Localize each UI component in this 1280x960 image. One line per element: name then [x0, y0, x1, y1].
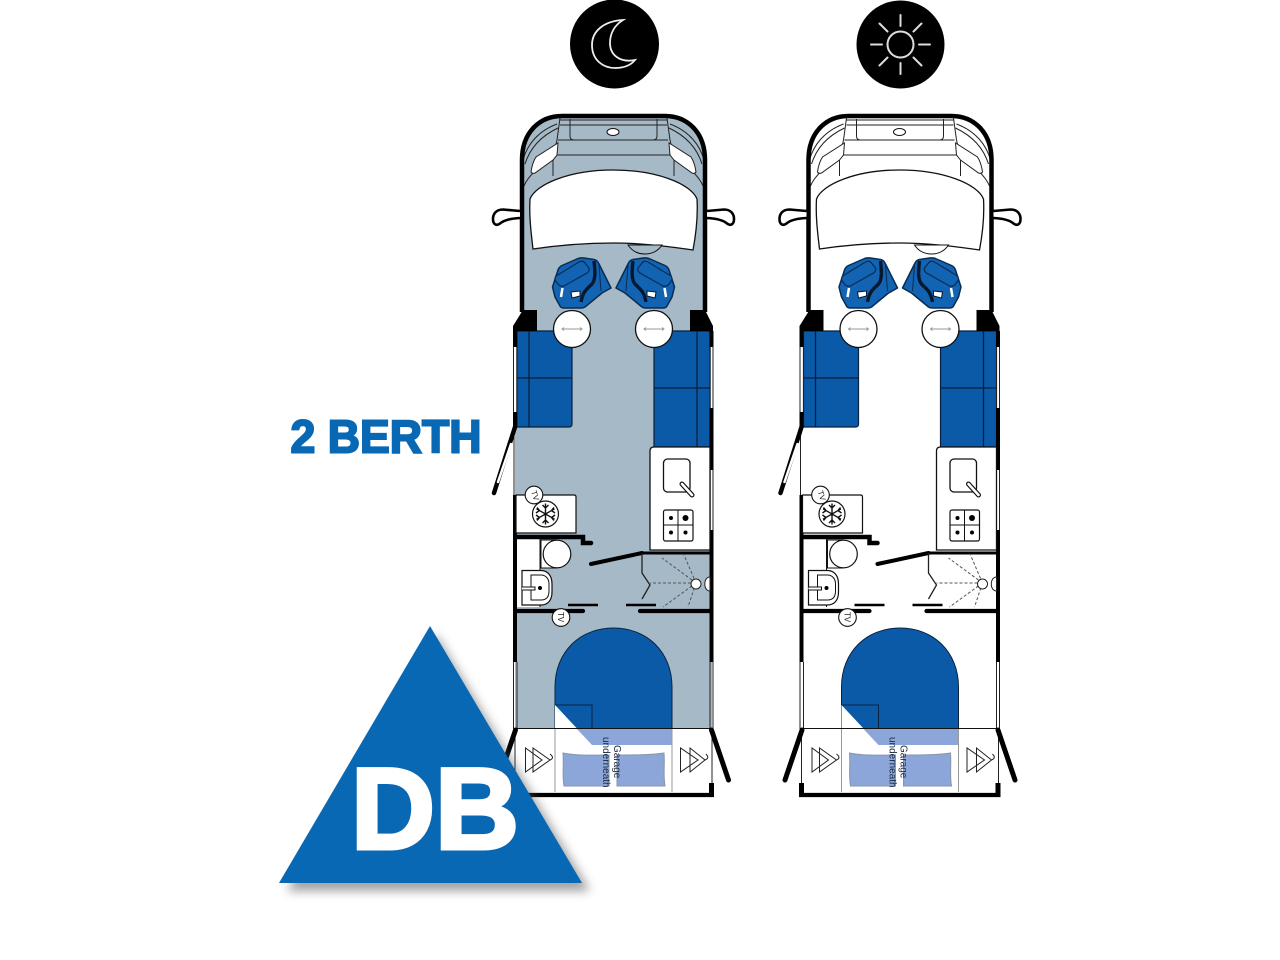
hob	[664, 510, 693, 541]
headlights	[531, 143, 696, 173]
badge: DB triangle	[279, 626, 590, 891]
icon: hangers left	[812, 748, 839, 772]
rear wardrobe section: underneath	[886, 737, 898, 788]
pillar blocks	[513, 310, 713, 331]
swivel circles	[840, 310, 959, 348]
interior walls and doors	[802, 537, 996, 611]
basin	[522, 570, 552, 605]
icon: hangers right	[680, 748, 708, 772]
garage underneath label: Garage	[898, 745, 908, 779]
TV label lower: TV	[556, 612, 565, 623]
seat: driver	[839, 258, 898, 308]
interior walls and doors	[516, 537, 710, 611]
entrance door	[494, 427, 515, 493]
shower	[642, 553, 710, 607]
right sofa	[940, 331, 996, 447]
toilet	[828, 540, 857, 568]
dashboard bump	[914, 245, 948, 254]
TV label lower: TV	[842, 612, 852, 623]
van floor	[802, 116, 998, 729]
wing mirrors	[780, 210, 1020, 225]
icon: moon (night layout)	[570, 0, 659, 88]
body outline	[522, 116, 705, 312]
rear wardrobe section	[785, 728, 1015, 795]
cab roof lines	[810, 118, 990, 186]
icon: snowflake	[532, 501, 558, 527]
icon: hangers right	[967, 748, 994, 772]
pillar blocks	[800, 310, 1000, 331]
TV label lower	[552, 609, 570, 626]
TV label upper: TV	[529, 489, 541, 502]
hob	[950, 510, 980, 541]
roof vent	[607, 128, 619, 136]
swivel circles	[554, 310, 672, 348]
entrance door	[780, 427, 802, 493]
pillow right	[617, 753, 665, 786]
pillow left	[563, 753, 609, 786]
TV label upper: TV	[816, 489, 828, 502]
shower	[928, 553, 996, 607]
fridge unit	[802, 486, 862, 533]
roof vent	[894, 128, 906, 136]
garage underneath label: Garage	[611, 745, 622, 779]
rear wardrobe section	[498, 728, 728, 795]
van floor	[515, 116, 712, 729]
left sofa	[804, 331, 858, 427]
washroom	[808, 539, 857, 607]
fridge unit	[516, 486, 576, 533]
badge text: DB	[351, 746, 519, 874]
windscreen	[530, 170, 697, 250]
side walls and windows	[514, 331, 713, 729]
floor plan: day layout	[780, 116, 1020, 795]
pillow right	[904, 753, 952, 786]
seat: passenger	[616, 258, 674, 308]
body outline	[808, 116, 992, 312]
icon: sun (day layout)	[856, 0, 944, 88]
rear wardrobe section: underneath	[600, 737, 611, 788]
icon: snowflake	[819, 501, 845, 527]
kitchen unit	[650, 447, 710, 550]
seat: passenger	[902, 258, 961, 308]
kitchen unit	[936, 447, 996, 550]
dashboard bump	[628, 245, 662, 254]
side walls and windows	[800, 331, 1000, 729]
badge triangle	[279, 626, 582, 883]
windscreen	[816, 170, 984, 250]
cab roof lines	[523, 118, 704, 186]
wing mirrors	[493, 210, 734, 225]
washroom	[517, 539, 571, 607]
badge shadow	[287, 634, 590, 891]
TV label lower	[839, 609, 856, 626]
headlights	[818, 143, 982, 173]
right sofa	[654, 331, 710, 447]
sink	[950, 459, 978, 495]
left sofa	[517, 331, 572, 427]
floor plan: night layout	[493, 116, 734, 795]
seat: driver	[552, 258, 611, 308]
heading: 2 berth: 2 BERTH	[290, 410, 482, 462]
sink	[664, 459, 692, 495]
basin	[808, 570, 838, 605]
pillow left	[850, 753, 896, 786]
bed	[842, 628, 958, 729]
bed	[555, 628, 672, 729]
icon: hangers left	[526, 748, 552, 772]
toilet	[541, 540, 571, 568]
